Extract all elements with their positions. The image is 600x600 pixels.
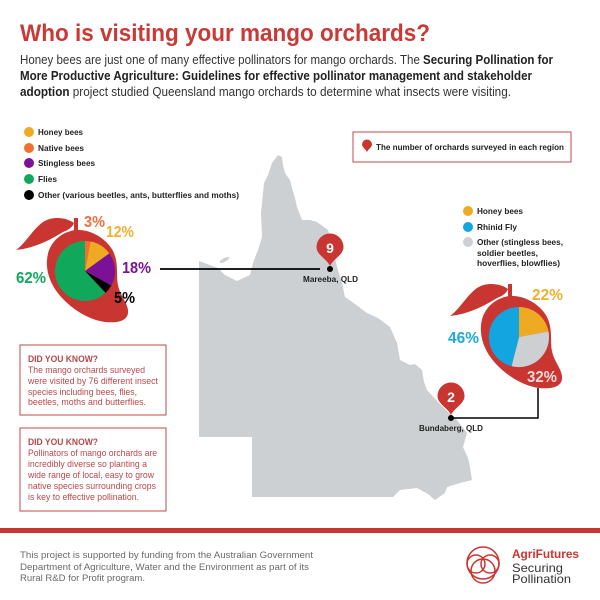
location marker: Bundaberg: [419, 382, 483, 433]
mango chart: Mareeba: 62%: [16, 270, 46, 287]
callout: did you know 1: The mango orchards surveyed: [28, 365, 145, 376]
connector: Mareeba: [160, 268, 320, 270]
mango chart: Mareeba: 5%: [114, 290, 135, 307]
connector: Bundaberg: [451, 388, 538, 418]
callout: did you know 2: Pollinators of mango orchards are: [28, 448, 157, 459]
logo: AgriFutures Securing Pollination: Pollination: [512, 572, 571, 586]
legend: left mango: [24, 127, 239, 200]
intro paragraph: [20, 53, 553, 99]
location marker: Bundaberg: Bundaberg, QLD: [419, 423, 483, 433]
intro paragraph: adoption project studied Queensland mango orchards to determine what insects were visiting.: [20, 85, 511, 99]
mango chart: Bundaberg: 22%: [532, 287, 563, 304]
legend: right mango: Rhinid Fly: [477, 222, 517, 232]
mango chart: Bundaberg: [448, 284, 563, 388]
mango chart: Mareeba: 3%: [84, 214, 105, 231]
mango chart: Bundaberg: 32%: [527, 369, 557, 386]
intro paragraph: More Productive Agriculture: Guidelines for effective pollinator management and stakeholder: [20, 69, 532, 83]
mango chart: Mareeba: 18%: [122, 260, 151, 277]
callout: did you know 1: [20, 345, 166, 415]
legend: right mango: Other (stingless bees,: [477, 237, 563, 247]
map: Queensland: [199, 155, 472, 500]
legend: left mango: Flies: [38, 174, 57, 184]
location marker: Bundaberg: 2: [447, 389, 455, 405]
logo: AgriFutures Securing Pollination: AgriFutures: [512, 549, 579, 561]
funding statement: This project is supported by funding from the Australian Government: [20, 550, 313, 561]
legend: right mango: soldier beetles,: [477, 248, 538, 258]
callout: did you know 2: native species surrounding crops: [28, 481, 156, 492]
callout: did you know 2: incredibly diverse so planting a: [28, 459, 148, 470]
callout: did you know 2: is key to effective pollination.: [28, 492, 139, 503]
legend: right mango: [463, 206, 563, 268]
key: orchards surveyed: The number of orchards surveyed in each region: [376, 142, 564, 152]
logo: AgriFutures Securing Pollination: Securing: [512, 561, 563, 575]
title: Who is visiting your mango orchards?: [20, 20, 430, 47]
intro paragraph: Honey bees are just one of many effective pollinators for mango orchards. The Securing Pollination for: [20, 53, 553, 67]
callout: did you know 1: DID YOU KNOW?: [28, 354, 98, 365]
location marker: Mareeba: 9: [326, 240, 334, 256]
callout: did you know 1: species including bees, flies,: [28, 387, 137, 398]
funding statement: Department of Agriculture, Water and the Environment as part of its: [20, 562, 309, 573]
mango chart: Mareeba: [16, 214, 151, 322]
callout: did you know 2: DID YOU KNOW?: [28, 437, 98, 448]
key: orchards surveyed: [353, 132, 571, 162]
funding statement: [20, 550, 313, 584]
legend: right mango: hoverflies, blowflies): [477, 258, 560, 268]
callout: did you know 1: beetles, moths and butterflies.: [28, 397, 146, 408]
logo: AgriFutures Securing Pollination: [467, 547, 579, 586]
mango chart: Bundaberg: 46%: [448, 330, 479, 347]
footer divider: [0, 528, 600, 533]
legend: right mango: Honey bees: [477, 206, 523, 216]
legend: left mango: Honey bees: [38, 127, 83, 137]
callout: did you know 2: [20, 428, 166, 511]
callout: did you know 2: wide range of local, easy to grow: [27, 470, 154, 481]
legend: left mango: Stingless bees: [38, 158, 95, 168]
mango chart: Mareeba: 12%: [106, 224, 134, 241]
location marker: Mareeba: [303, 234, 358, 284]
location marker: Mareeba: Mareeba, QLD: [303, 274, 358, 284]
legend: left mango: Native bees: [38, 143, 84, 153]
legend: left mango: Other (various beetles, ants, butterflies and moths): [38, 190, 239, 200]
callout: did you know 1: were visited by 76 different insect: [27, 376, 158, 387]
funding statement: Rural R&D for Profit program.: [20, 573, 145, 584]
